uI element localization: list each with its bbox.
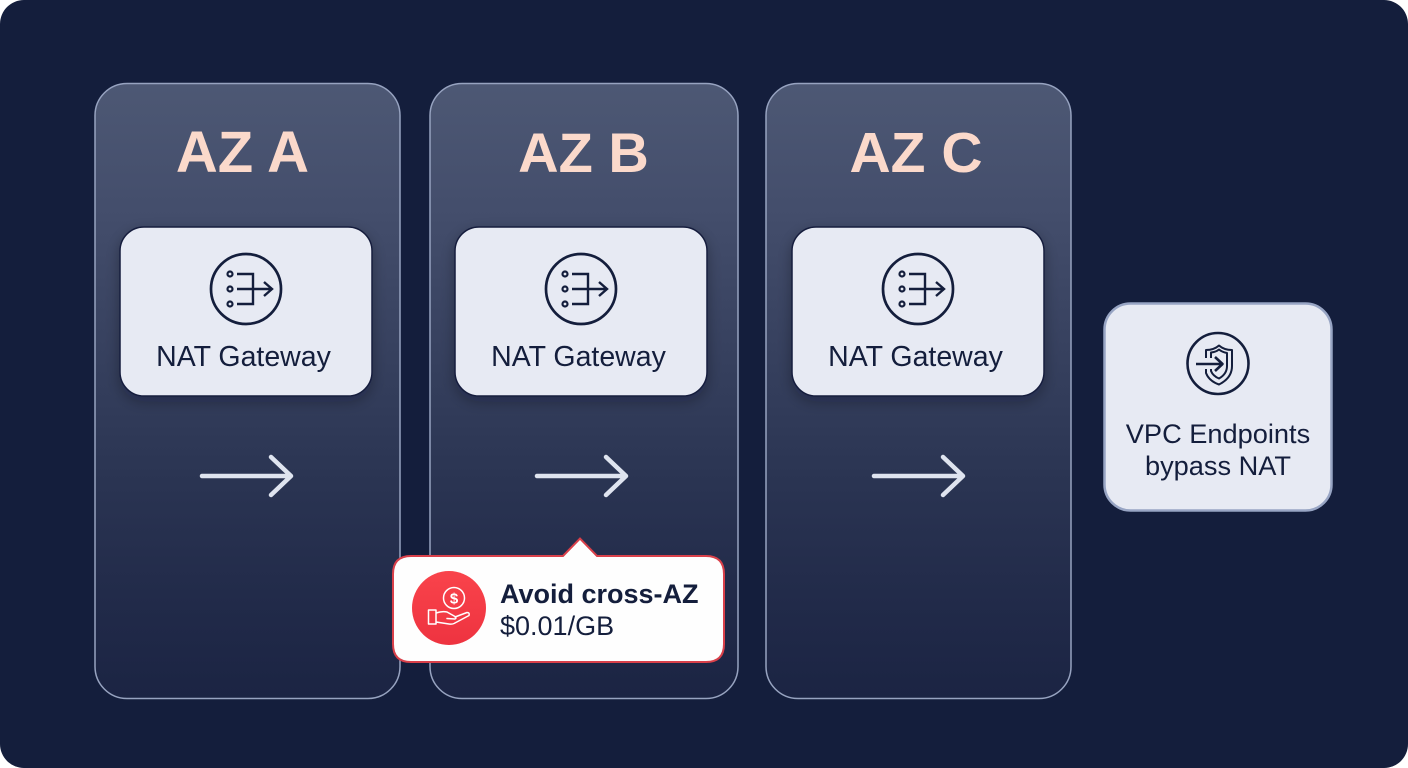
panel: AZ A: [95, 84, 400, 698]
card: VPC Endpoints: [1104, 304, 1332, 510]
icon: NAT gateway: [546, 254, 616, 324]
icon: NAT gateway: [883, 254, 953, 324]
label: VPC Endpoints bypass NAT: bypass NAT: [1145, 450, 1291, 481]
label: VPC Endpoints bypass NAT: VPC Endpoints: [1126, 418, 1310, 449]
heading: AZ B: AZ B: [518, 121, 649, 184]
label: NAT Gateway: NAT Gateway: [156, 341, 332, 373]
heading: AZ C: AZ C: [850, 121, 982, 185]
card: NAT Gateway B: [455, 227, 707, 396]
label: NAT Gateway: NAT Gateway: [828, 341, 1004, 373]
icon: hand with coin: $: [450, 590, 459, 608]
callout: avoid cross-AZ: [393, 538, 724, 662]
arrow: [874, 457, 963, 495]
heading: AZ A: AZ A: [176, 120, 309, 185]
panel: AZ C: [766, 84, 1071, 698]
icon: NAT gateway: [211, 254, 281, 324]
label: NAT Gateway: NAT Gateway: [491, 341, 667, 373]
card: NAT Gateway C: [792, 227, 1044, 396]
callout price: $0.01/GB: [500, 611, 614, 641]
arrow: [202, 457, 291, 495]
panel: AZ B: [430, 84, 738, 698]
arrow: [537, 457, 626, 495]
card: NAT Gateway A: [120, 227, 372, 396]
callout title: Avoid cross-AZ: [500, 579, 699, 609]
icon: hand with coin: [412, 571, 486, 645]
icon: shield with arrow: [1188, 333, 1248, 394]
